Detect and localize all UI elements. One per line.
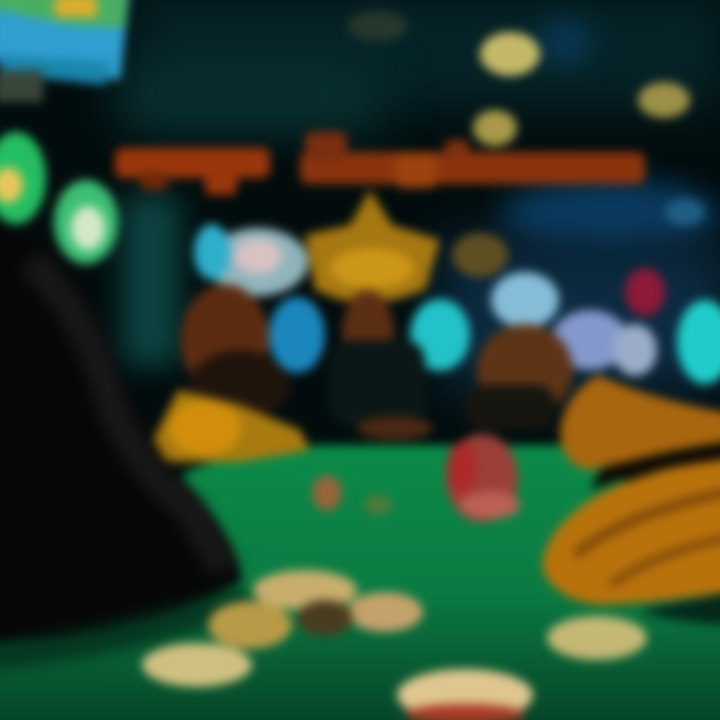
distant lights	[348, 11, 705, 226]
foreground chips	[142, 570, 647, 720]
foreground dark figure	[0, 225, 260, 670]
poker table felt	[0, 445, 720, 720]
right hands	[543, 375, 720, 625]
gold star trophy	[305, 190, 508, 300]
left mid screens	[0, 132, 118, 264]
seated players silhouettes	[181, 284, 573, 440]
red chip stack	[312, 434, 520, 522]
bright casino lights row	[194, 224, 720, 384]
gold pile left	[148, 390, 310, 462]
top left screen	[0, 0, 130, 102]
title: blurred orange lettering	[115, 132, 645, 195]
